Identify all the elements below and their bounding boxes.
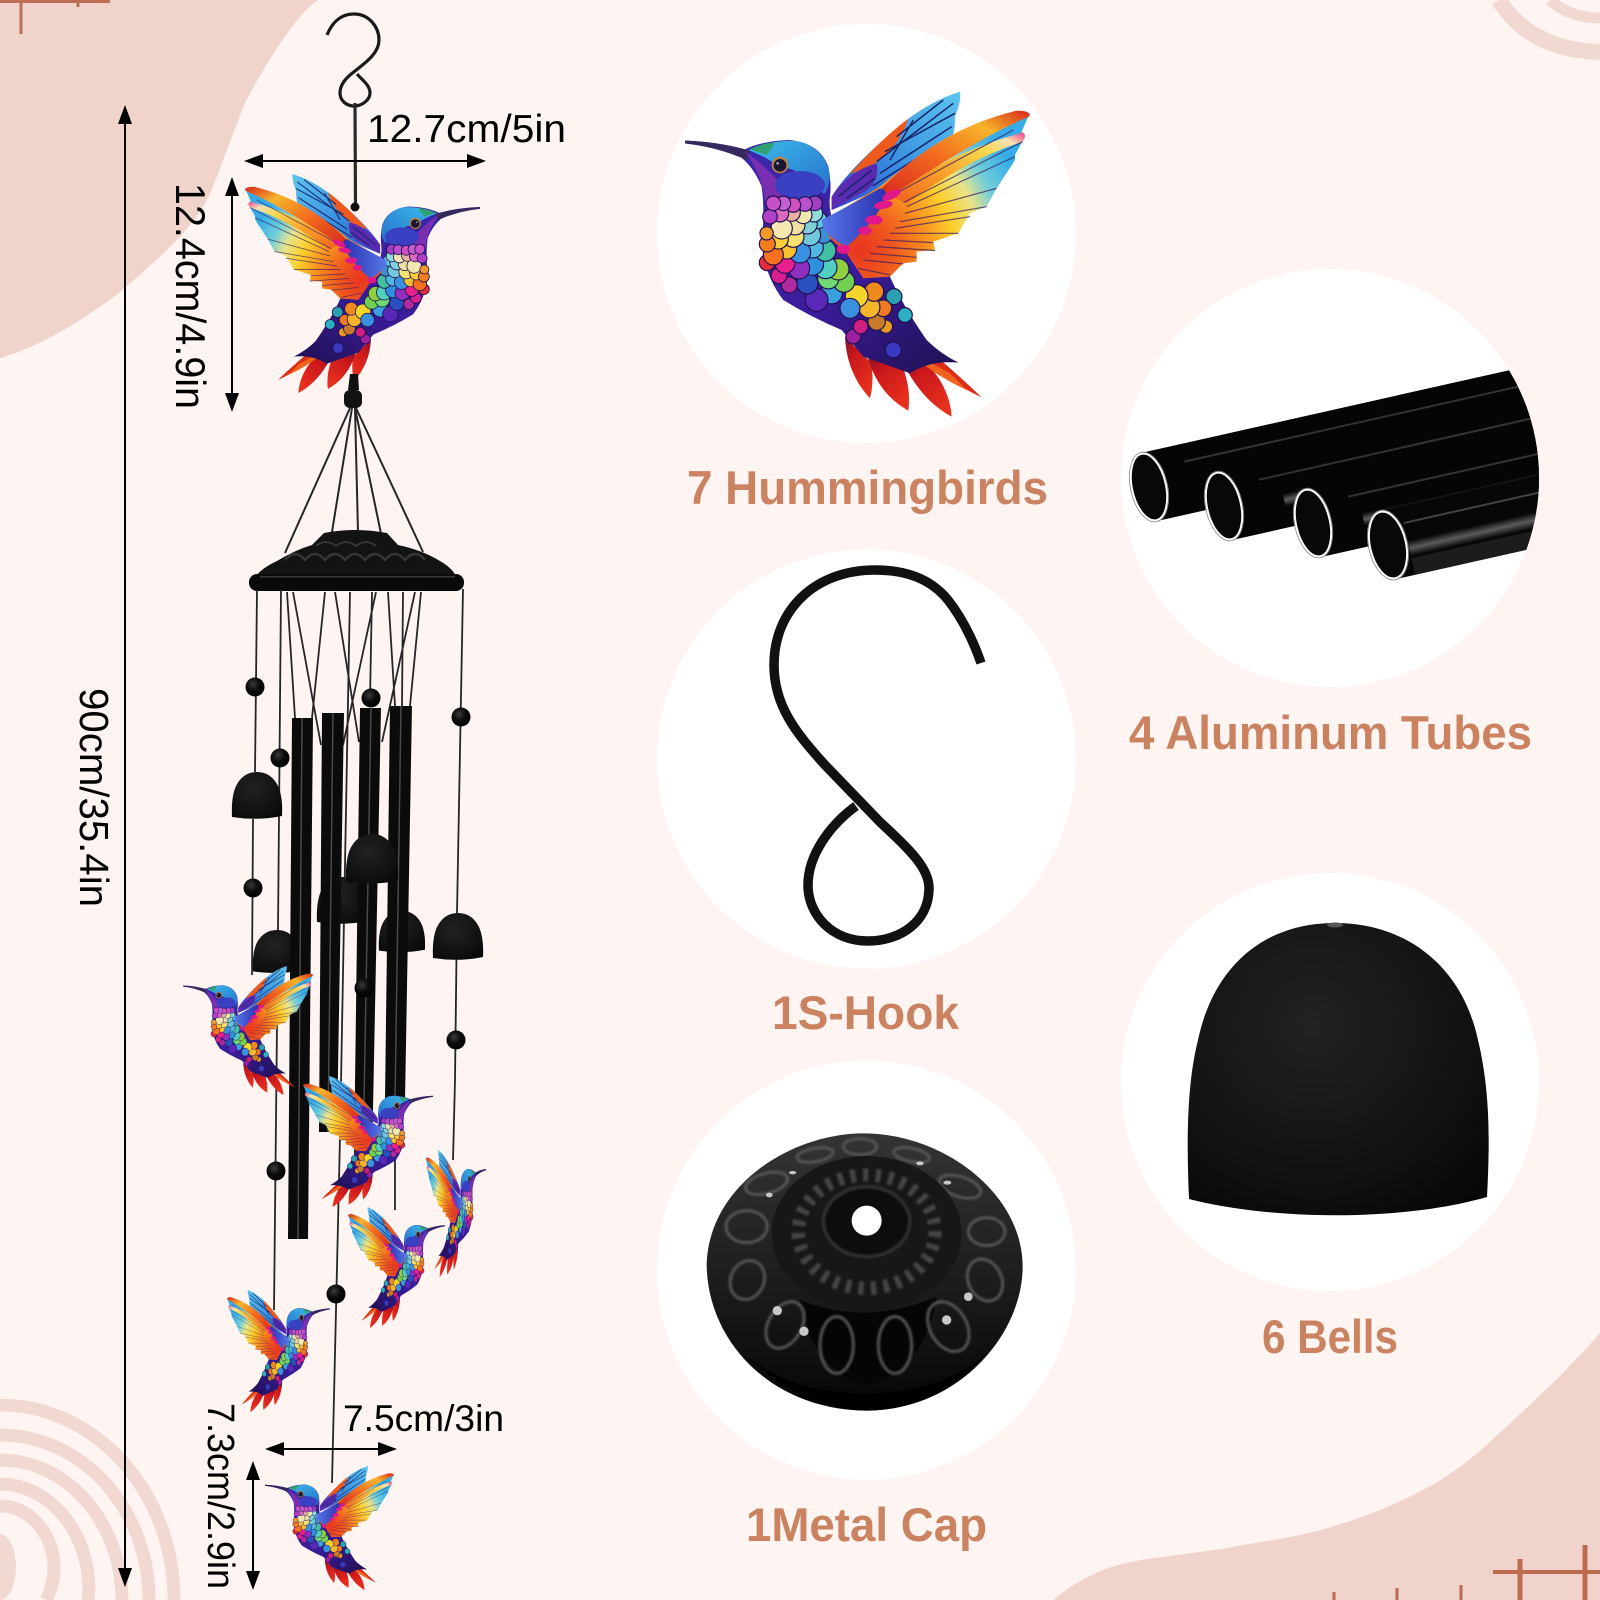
background blob: bottom right [1054, 1333, 1600, 1600]
panel: hummingbird part [657, 24, 1076, 443]
hanging hummingbird 6 [265, 1466, 394, 1590]
beads [244, 678, 470, 1304]
dimension: top bird height [167, 177, 239, 412]
wind chime assembly [183, 14, 486, 1590]
label: 6 Bells: 6 Bells [1262, 1310, 1398, 1363]
icon: four black tubes [1128, 370, 1539, 580]
icon: large bell [1188, 922, 1489, 1215]
dimension: small bird height [199, 1403, 260, 1590]
hanging cord [353, 103, 357, 207]
panel: metal cap part [657, 1060, 1076, 1480]
dimension: top bird width [244, 108, 566, 168]
hanging hummingbird 5 [227, 1290, 330, 1412]
dimension: small bird height: 7.3cm/2.9in [199, 1403, 241, 1589]
decoration: arcs top right [1499, 0, 1600, 52]
chime tubes [288, 706, 412, 1239]
icon: embossed metal cap [707, 1133, 1023, 1411]
label: 4 Aluminum Tubes: 4 Aluminum Tubes [1129, 706, 1532, 759]
label: 1S-Hook: 1S-Hook [772, 986, 960, 1039]
bells behind the tubes [253, 877, 425, 973]
dimension: top bird width: 12.7cm/5in [367, 108, 566, 151]
panel: bell part [1121, 873, 1539, 1291]
dimension: small bird width [265, 1398, 504, 1456]
panel: aluminum tubes part [1121, 269, 1539, 687]
decoration: rust ticks top left [0, 0, 110, 34]
knot and connector below top bird [344, 202, 362, 408]
panel: S-hook part [657, 550, 1076, 968]
dimension: overall height: 90cm/35.4in [71, 688, 117, 907]
dimension: top bird height: 12.4cm/4.9in [167, 183, 214, 409]
strings to bells, tubes and birds [252, 589, 463, 1483]
hanging hummingbird 2 [303, 1076, 433, 1207]
decoration: rust ticks bottom right [1334, 1545, 1600, 1600]
decoration: concentric rings bottom left [0, 1405, 174, 1600]
hanging hummingbird 4 [348, 1207, 445, 1328]
dimension: overall height [71, 105, 132, 1587]
hanging hummingbird 3 [426, 1150, 486, 1277]
dimension: small bird width: 7.5cm/3in [343, 1398, 504, 1439]
top hummingbird [245, 174, 480, 393]
top cap [249, 530, 464, 591]
label: 7 Hummingbirds: 7 Hummingbirds [687, 461, 1048, 514]
hanging hummingbird 1 [183, 966, 313, 1095]
strings to cap [285, 408, 423, 553]
label: 1Metal Cap: 1Metal Cap [746, 1498, 987, 1551]
hanging S-hook [327, 14, 379, 106]
bells in front [232, 772, 483, 960]
icon: large hummingbird [685, 92, 1030, 417]
background blob: top left [0, 0, 318, 358]
icon: S-hook [774, 570, 981, 941]
